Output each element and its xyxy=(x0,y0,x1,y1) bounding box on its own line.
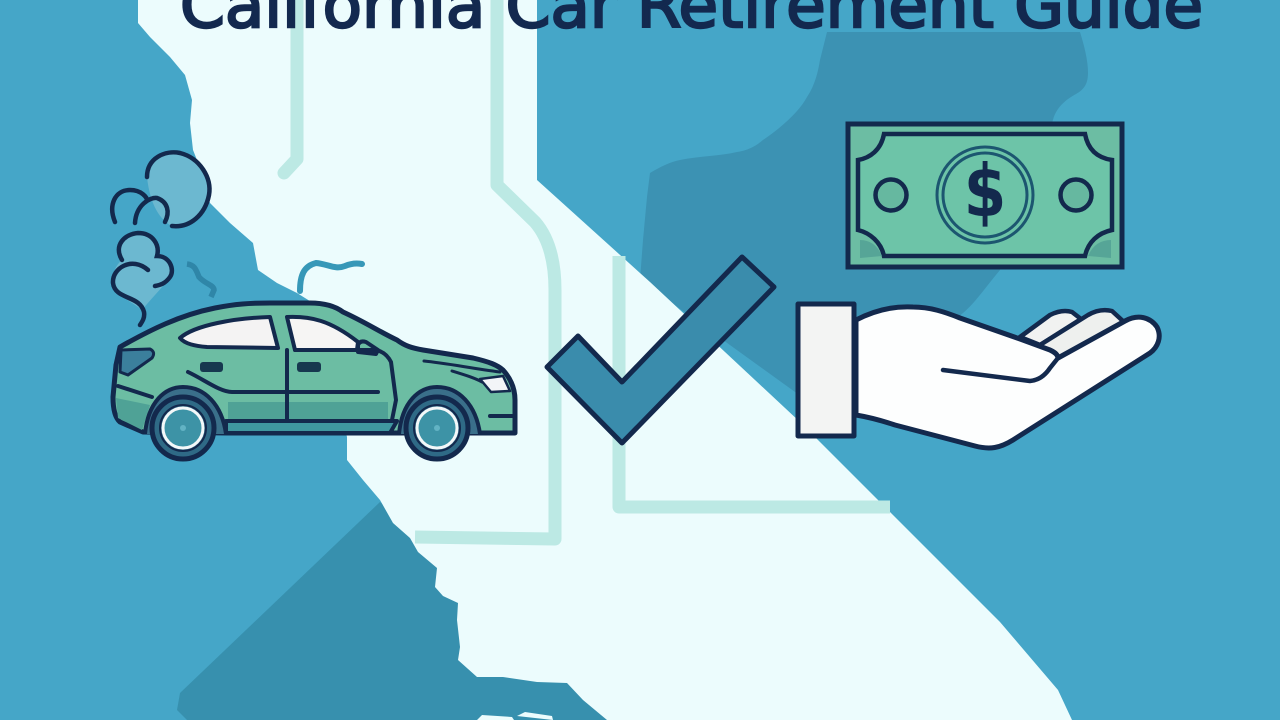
banknote corners xyxy=(860,240,882,258)
front wheel xyxy=(399,387,480,459)
rear wheel xyxy=(145,387,226,459)
banknote inner border xyxy=(858,134,1112,256)
door handles xyxy=(200,362,223,372)
map route lines xyxy=(284,0,890,539)
rear window xyxy=(180,317,278,348)
dollar sign: $ xyxy=(964,149,1006,233)
front window xyxy=(287,317,358,350)
squiggle: bay river xyxy=(300,263,362,291)
headlight xyxy=(480,376,510,392)
islands xyxy=(477,712,553,720)
icon: check mark xyxy=(547,257,774,443)
icon: banknote xyxy=(848,124,1122,267)
banknote left circle xyxy=(876,180,906,210)
icon: car xyxy=(113,303,515,459)
squiggle: river left xyxy=(187,264,214,297)
banknote medallion xyxy=(937,147,1033,243)
tail light xyxy=(120,349,154,375)
icon: open hand xyxy=(798,304,1159,448)
icon: exhaust smoke xyxy=(112,152,209,325)
palm xyxy=(856,307,1159,448)
side mirror xyxy=(358,341,378,354)
car body xyxy=(113,303,515,433)
thumb line xyxy=(943,350,1058,381)
back fingers xyxy=(1020,311,1081,345)
dark land region: southwest xyxy=(177,502,620,720)
dark land region: northeast xyxy=(640,32,1088,410)
California map shape xyxy=(138,0,1072,720)
car lower panel xyxy=(228,402,388,419)
car sill xyxy=(226,421,397,433)
cuff xyxy=(798,304,854,436)
car door lines xyxy=(118,350,513,421)
banknote right circle xyxy=(1060,180,1092,210)
